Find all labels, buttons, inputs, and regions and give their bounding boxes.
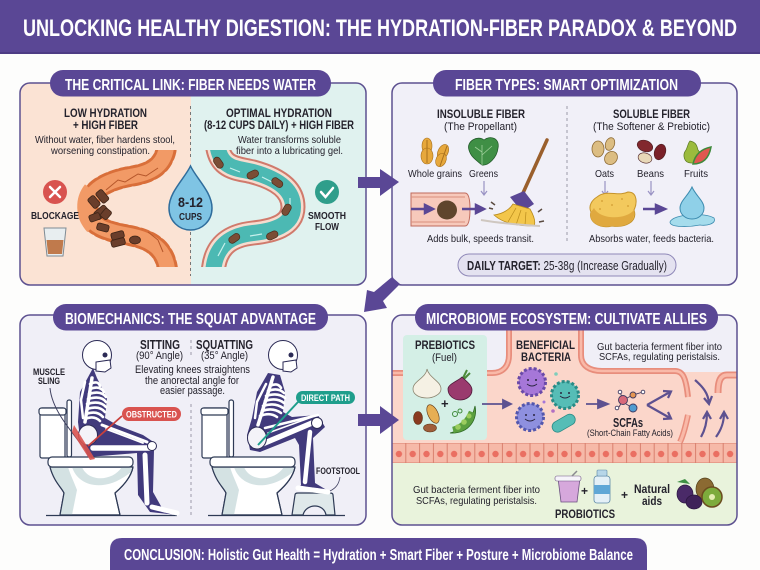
panel heading: FIBER TYPES: SMART OPTIMIZATION bbox=[455, 77, 678, 94]
peristalsis note: SCFAs, regulating peristalsis. bbox=[599, 351, 720, 363]
soluble heading: SOLUBLE FIBER bbox=[613, 107, 690, 121]
icon: gel water drop bbox=[670, 187, 715, 227]
fiber food labels, insoluble: Whole grains bbox=[408, 168, 462, 180]
icon: garlic bbox=[413, 369, 441, 398]
footstool label bbox=[316, 466, 360, 491]
optimal hydration text: (8-12 CUPS DAILY) + HIGH FIBER bbox=[204, 118, 354, 132]
arrow: fiber types to biomechanics bbox=[364, 277, 400, 312]
probiotics label: PROBIOTICS bbox=[555, 507, 615, 521]
daily target pill: DAILY TARGET: 25-38g (Increase Gradually) bbox=[467, 259, 667, 273]
arrows: SCFAs to peristalsis bbox=[647, 380, 728, 437]
icon: smooth flow: SMOOTH bbox=[308, 210, 346, 222]
obstructed label: OBSTRUCTED bbox=[126, 410, 177, 420]
fiber food labels, soluble: Fruits bbox=[684, 168, 708, 180]
fiber food labels, soluble: Oats bbox=[595, 168, 614, 180]
sitting and squatting text: (35° Angle) bbox=[201, 350, 248, 362]
icon: blockage: BLOCKAGE bbox=[31, 210, 79, 222]
SCFAs label: SCFAs bbox=[613, 416, 643, 430]
sitting and squatting text: SITTING bbox=[140, 338, 180, 352]
panel: microbiome ecosystem bbox=[392, 304, 737, 525]
arrows: foods to sponge bbox=[602, 181, 654, 195]
insoluble heading: (The Propellant) bbox=[444, 121, 517, 133]
prebiotics block bbox=[403, 335, 487, 440]
conclusion banner bbox=[110, 538, 647, 570]
panel heading bbox=[53, 304, 328, 330]
natural aids label: Natural bbox=[634, 482, 670, 496]
plus sign: + bbox=[621, 488, 628, 502]
obstructed label bbox=[88, 407, 181, 446]
peristalsis note bbox=[597, 341, 722, 363]
insoluble heading: INSOLUBLE FIBER bbox=[437, 107, 525, 121]
intestine channel bbox=[505, 330, 590, 372]
icon: glass of water bbox=[44, 228, 66, 256]
icon: beans bbox=[414, 403, 442, 432]
plus sign: + bbox=[581, 484, 588, 498]
SCFAs label bbox=[587, 416, 673, 438]
plus sign: + bbox=[441, 396, 449, 411]
icon: yogurt bbox=[555, 471, 581, 502]
optimal hydration text bbox=[204, 106, 354, 157]
icon: water drop: 8-12 bbox=[178, 194, 203, 210]
low hydration text: Without water, fiber hardens stool, bbox=[35, 134, 175, 146]
optimal hydration text: Water transforms soluble bbox=[238, 134, 341, 146]
icon: beans bbox=[636, 138, 668, 165]
natural aids label: aids bbox=[642, 494, 662, 508]
icon: fruits bbox=[684, 141, 711, 164]
panel heading: THE CRITICAL LINK: FIBER NEEDS WATER bbox=[65, 77, 316, 94]
sitting skeleton bbox=[78, 340, 177, 515]
icon: broom bbox=[481, 140, 547, 226]
icon: plums and kiwi bbox=[677, 478, 722, 509]
fiber food labels, soluble: Beans bbox=[637, 168, 664, 180]
icon: sponge bbox=[590, 192, 636, 227]
fiber food labels, soluble bbox=[595, 168, 708, 180]
arrow: critical link to fiber types bbox=[358, 169, 399, 196]
icon: water drop: CUPS bbox=[179, 211, 202, 223]
icon: oats bbox=[592, 136, 620, 167]
bacteria illustration bbox=[516, 368, 578, 434]
panel: the critical link bbox=[20, 70, 366, 285]
arrow: bacteria to SCFAs bbox=[586, 400, 608, 408]
arrow: greens to tube bbox=[481, 181, 487, 195]
sitting and squatting text: SQUATTING bbox=[196, 338, 253, 352]
green base bbox=[392, 463, 737, 525]
blocked colon illustration bbox=[86, 140, 168, 277]
direct path label bbox=[258, 391, 355, 445]
low hydration text: LOW HYDRATION bbox=[64, 106, 147, 120]
direct path label: DIRECT PATH bbox=[301, 393, 350, 404]
icon: kefir bottle bbox=[594, 470, 610, 503]
prebiotics block: PREBIOTICS bbox=[415, 338, 475, 352]
fiber food labels, insoluble bbox=[408, 168, 498, 180]
beneficial bacteria heading: BENEFICIAL bbox=[516, 338, 575, 352]
footstool bbox=[292, 493, 335, 515]
SCFAs label: (Short-Chain Fatty Acids) bbox=[587, 428, 673, 438]
optimal hydration text: fiber into a lubricating gel. bbox=[236, 145, 343, 157]
arrow: prebiotics to bacteria bbox=[482, 400, 511, 408]
soluble caption: Absorbs water, feeds bacteria. bbox=[589, 233, 714, 245]
epithelial cells bbox=[392, 443, 737, 463]
prebiotics block: (Fuel) bbox=[432, 352, 457, 364]
panel: biomechanics bbox=[20, 304, 366, 525]
muscle sling label: MUSCLE bbox=[33, 367, 65, 377]
probiotics note bbox=[413, 484, 540, 507]
beneficial bacteria heading: BACTERIA bbox=[521, 350, 571, 364]
panel heading bbox=[433, 70, 701, 96]
sitting and squatting text: Elevating knees straightens bbox=[135, 364, 250, 376]
footstool label: FOOTSTOOL bbox=[316, 466, 360, 476]
hydrated colon illustration bbox=[212, 140, 293, 277]
low hydration text bbox=[35, 106, 175, 157]
arrow: biomechanics to microbiome bbox=[358, 406, 399, 434]
soluble heading bbox=[593, 107, 710, 133]
soluble heading: (The Softener & Prebiotic) bbox=[593, 121, 710, 133]
panel: fiber types bbox=[392, 70, 737, 285]
sitting toilet bbox=[39, 400, 177, 516]
peristalsis note: Gut bacteria ferment fiber into bbox=[597, 341, 722, 353]
sitting and squatting text: (90° Angle) bbox=[136, 350, 183, 362]
squatting toilet bbox=[201, 400, 345, 516]
arrow: sponge to gel bbox=[643, 205, 665, 213]
sitting and squatting text: the anorectal angle for bbox=[145, 375, 239, 387]
icon: water drop bbox=[169, 166, 212, 230]
squatting skeleton bbox=[247, 340, 330, 492]
icon: pea pod bbox=[450, 406, 476, 433]
natural aids label bbox=[634, 482, 670, 508]
panel heading: BIOMECHANICS: THE SQUAT ADVANTAGE bbox=[65, 311, 316, 328]
daily target pill bbox=[458, 254, 676, 276]
low hydration text: worsening constipation. bbox=[50, 145, 150, 157]
icon: whole grains bbox=[421, 138, 451, 168]
header banner bbox=[0, 0, 760, 54]
icon: SCFA molecule bbox=[615, 390, 645, 412]
insoluble caption: Adds bulk, speeds transit. bbox=[427, 233, 534, 245]
panel heading bbox=[50, 70, 331, 96]
beneficial bacteria heading bbox=[516, 338, 575, 364]
muscle sling label bbox=[33, 367, 95, 460]
icon: blockage bbox=[31, 180, 79, 222]
intestine tube with stool bbox=[411, 193, 484, 226]
fiber food labels, insoluble: Greens bbox=[469, 168, 498, 180]
icon: onion bbox=[448, 370, 472, 400]
sitting and squatting text: easier passage. bbox=[160, 385, 225, 397]
muscle sling label: SLING bbox=[38, 376, 60, 386]
optimal hydration text: OPTIMAL HYDRATION bbox=[226, 106, 332, 120]
sitting and squatting text bbox=[135, 338, 253, 397]
icon: smooth flow: FLOW bbox=[315, 221, 339, 233]
icon: greens bbox=[469, 138, 498, 165]
panel heading bbox=[415, 304, 718, 330]
low hydration text: + HIGH FIBER bbox=[73, 118, 138, 132]
icon: smooth flow bbox=[308, 180, 346, 233]
probiotics note: SCFAs, regulating peristalsis. bbox=[416, 495, 537, 507]
insoluble heading bbox=[437, 107, 525, 133]
probiotics note: Gut bacteria ferment fiber into bbox=[413, 484, 540, 496]
